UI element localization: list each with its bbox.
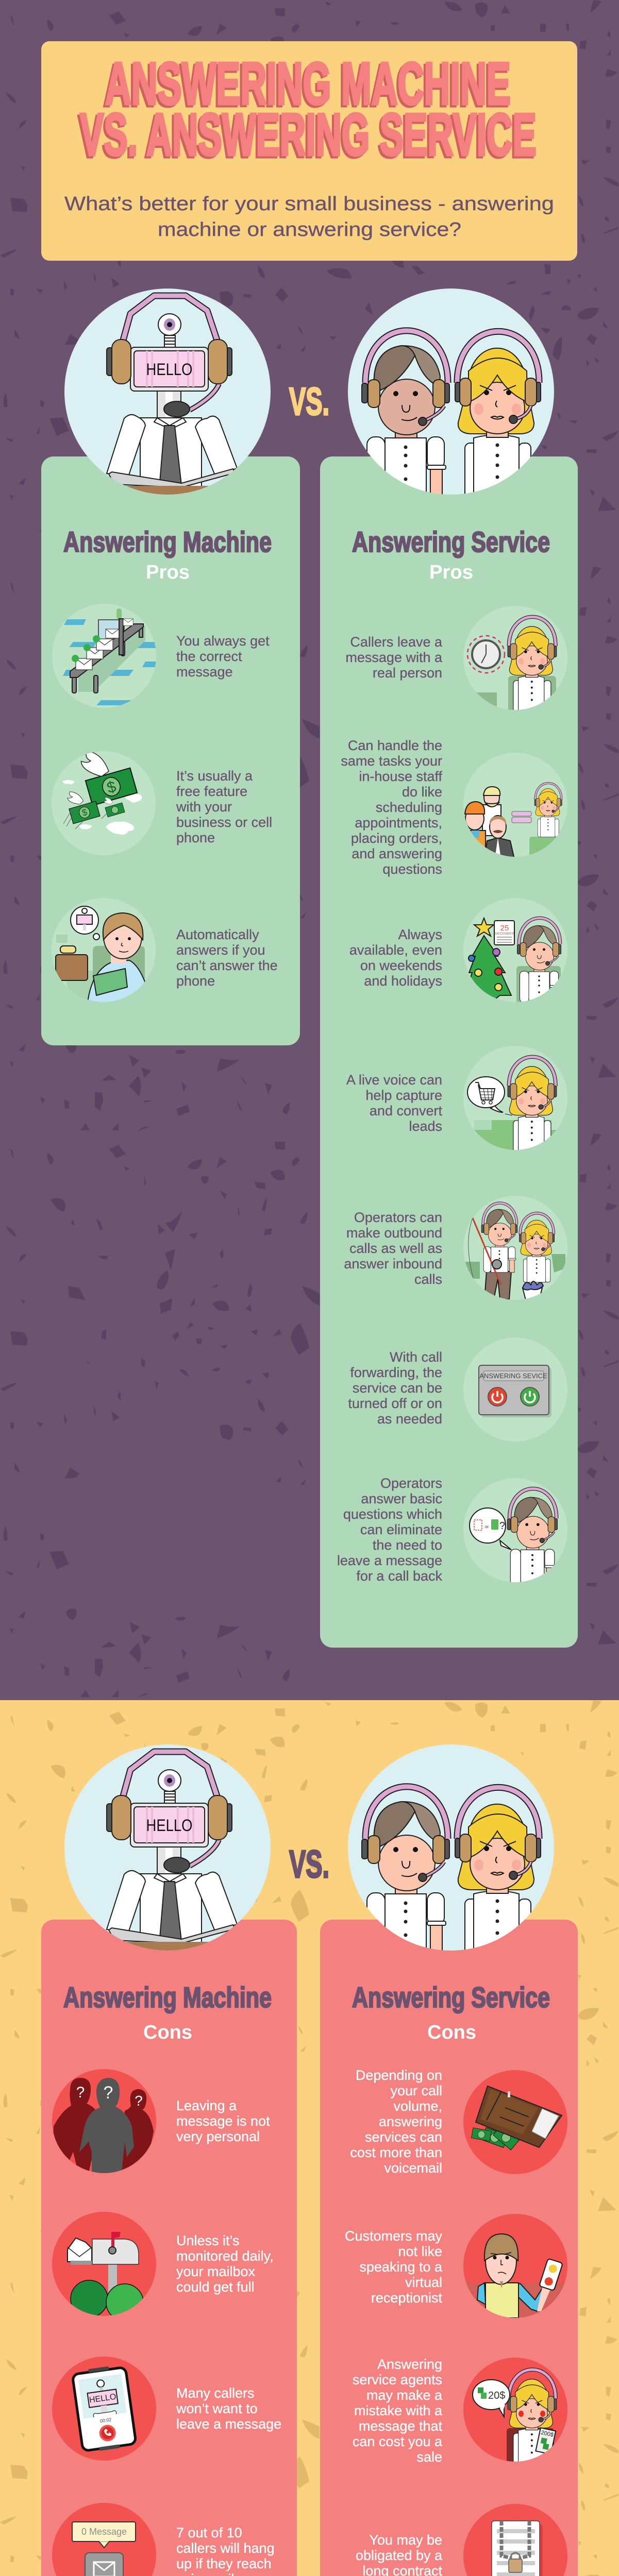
pro: capture leads: [346, 1046, 567, 1153]
icon: anonymous silhouettes: ?: [104, 2083, 113, 2103]
text: your mailbox: [176, 2264, 256, 2279]
heading: cons right: Cons: [427, 2022, 476, 2043]
text: and holidays: [364, 973, 442, 989]
text: could get full: [176, 2279, 255, 2295]
icon: empty message notification: 0 Message: [81, 2527, 127, 2537]
icon: christmas tree and calendar: DECEMBER: [495, 932, 514, 936]
text: and answering: [352, 846, 442, 861]
icon: flying money: $: [105, 778, 118, 797]
con: mistakes: [353, 2357, 567, 2466]
con: callers hang up: [52, 2503, 275, 2576]
panel: answering service pros: [320, 456, 578, 1648]
text: business or cell: [176, 815, 272, 830]
icon: fishing and flowers operators: [463, 1196, 567, 1300]
background: purple pros section: [0, 0, 619, 1700]
text: real person: [373, 665, 442, 681]
icon: clock and operator: [463, 606, 567, 713]
icon: anonymous silhouettes: [52, 2069, 156, 2173]
text: service agents: [353, 2372, 442, 2387]
text: virtual: [405, 2275, 442, 2290]
text: Depending on: [356, 2067, 442, 2083]
text: make outbound: [346, 1225, 442, 1241]
icon: on off switch panel: [463, 1337, 567, 1442]
pro: call forwarding: [348, 1337, 567, 1442]
text: help capture: [365, 1088, 442, 1103]
text: Operators can: [354, 1210, 442, 1225]
illustration: human operators: [348, 1744, 554, 1956]
icon: smartphone with robot: [52, 2357, 156, 2461]
heading: answering machine: Answering Machine: [63, 526, 272, 558]
text: speaking to a: [359, 2259, 443, 2275]
text: with your: [176, 799, 232, 815]
icon: anonymous silhouettes: ?: [76, 2084, 85, 2101]
text: scheduling: [376, 800, 442, 815]
panel: answering machine cons: [41, 1920, 297, 2576]
icon: smartphone with robot: 00:02: [99, 2417, 112, 2424]
vs label: VS.: [289, 380, 329, 423]
illustration: human operators: [348, 289, 554, 500]
text: sale: [416, 2449, 442, 2465]
text: for a call back: [356, 1568, 442, 1584]
text: It’s usually a: [176, 768, 253, 784]
text: Answering: [377, 2357, 442, 2372]
text: answer inbound: [344, 1256, 442, 1272]
text: forwarding, the: [350, 1365, 442, 1380]
text: your call: [390, 2083, 442, 2098]
icon: person with book: [52, 898, 156, 1004]
pro: free feature: [52, 750, 272, 855]
illustration: robot answering machine: [64, 1744, 271, 1952]
text: Unless it’s: [176, 2233, 240, 2248]
con: virtual receptionist: [345, 2214, 567, 2319]
text: turned off or on: [348, 1396, 442, 1411]
panel: answering machine pros: [41, 456, 300, 1045]
pro: outbound and inbound: [344, 1196, 567, 1300]
text: as needed: [377, 1411, 442, 1427]
icon: operator with wrong price: [463, 2358, 567, 2466]
text: questions which: [343, 1506, 442, 1522]
panel: answering service cons: [320, 1920, 578, 2576]
icon: shopping bubble and operator: [463, 1046, 567, 1153]
text: do like: [402, 784, 442, 800]
text: obligated by a: [356, 2548, 443, 2563]
pro: real person: [345, 606, 567, 713]
icon: conveyor of envelopes: [52, 604, 156, 708]
icon: staff equals operator: [463, 753, 567, 860]
background: yellow cons section: [0, 1700, 619, 2576]
text: leads: [409, 1118, 442, 1134]
text: message: [176, 664, 233, 680]
heading: answering service: Answering Service: [352, 1981, 550, 2013]
text: phone: [176, 830, 215, 845]
text: receptionist: [371, 2290, 442, 2306]
icon: on off switch panel: ANSWERING SEVICE: [479, 1372, 547, 1380]
icon: empty message notification: [52, 2503, 156, 2576]
icon: flying money: [52, 750, 156, 855]
text: You may be: [369, 2532, 442, 2548]
text: monitored daily,: [176, 2248, 274, 2264]
title: [80, 50, 537, 168]
text: Automatically: [176, 927, 259, 942]
icon: operator with wrong price: 200$: [540, 2430, 554, 2438]
icon: operator with wrong price: 20$: [488, 2390, 505, 2401]
pro: automatic answer: [52, 898, 278, 1004]
subtitle: What’s better for your small business - answering: [64, 193, 554, 215]
icon: anonymous silhouettes: ?: [135, 2093, 143, 2109]
text: leave a message: [176, 2416, 281, 2432]
pro: handles in-house tasks: [341, 738, 567, 877]
text: message that: [359, 2418, 442, 2434]
icon: open wallet: [463, 2070, 567, 2174]
text: in-house staff: [359, 769, 442, 784]
text: message with a: [345, 650, 443, 665]
text: message is not: [176, 2113, 270, 2129]
text: With call: [390, 1349, 442, 1365]
icon: contract with chains: [463, 2504, 567, 2576]
vs label: VS.: [289, 1842, 329, 1886]
icon: christmas tree and calendar: [463, 898, 567, 1003]
text: appointments,: [355, 815, 442, 831]
text: the correct: [176, 649, 242, 664]
text: service can be: [353, 1380, 442, 1396]
subtitle: [64, 193, 554, 241]
text: callers will hang: [176, 2540, 275, 2556]
text: calls: [414, 1272, 442, 1287]
heading: answering machine: Answering Machine: [63, 1981, 272, 2013]
text: Always: [398, 927, 442, 942]
icon: annoyed man with phone: [463, 2214, 567, 2319]
text: Can handle the: [348, 738, 442, 753]
text: answer basic: [361, 1491, 442, 1506]
text: not like: [398, 2244, 442, 2259]
text: very personal: [176, 2129, 260, 2144]
text: and convert: [370, 1103, 442, 1118]
subtitle: machine or answering service?: [158, 219, 461, 241]
text: answers if you: [176, 942, 265, 958]
heading: pros left: Pros: [146, 562, 190, 583]
icon: smartphone with robot: HELLO: [89, 2393, 116, 2405]
text: Operators: [380, 1476, 442, 1491]
text: placing orders,: [351, 831, 442, 846]
text: calls as well as: [349, 1241, 442, 1256]
con: long contract: [356, 2504, 567, 2576]
icon: question bubble and operator: ?: [499, 1520, 505, 1532]
text: Callers leave a: [350, 634, 443, 650]
pro: correct message: [52, 604, 270, 708]
text: A live voice can: [346, 1072, 442, 1088]
text: questions: [382, 861, 442, 877]
con: callers won't leave message: [52, 2357, 281, 2461]
text: Leaving a: [176, 2098, 237, 2113]
text: may make a: [366, 2387, 443, 2403]
text: You always get: [176, 633, 270, 649]
text: 7 out of 10: [176, 2525, 242, 2540]
heading: answering service: Answering Service: [352, 526, 550, 558]
con: mailbox full: [52, 2212, 274, 2321]
text: leave a message: [337, 1553, 442, 1568]
text: can’t answer the: [176, 958, 278, 973]
con: not personal: [52, 2069, 270, 2173]
illustration: robot answering machine: HELLO: [146, 1816, 193, 1835]
pro: basic questions: [337, 1476, 567, 1585]
text: voicemail: [384, 2160, 442, 2176]
text: volume,: [393, 2098, 442, 2114]
text: can eliminate: [360, 1522, 442, 1537]
title card: [41, 41, 577, 261]
text: answering: [379, 2114, 442, 2129]
heading: pros right: Pros: [429, 562, 473, 583]
text: cost more than: [350, 2145, 442, 2160]
text: can cost you a: [353, 2434, 443, 2449]
text: free feature: [176, 784, 247, 799]
text: Customers may: [345, 2228, 442, 2244]
pro: always available: [349, 898, 567, 1003]
text: the need to: [373, 1537, 442, 1553]
text: on weekends: [360, 958, 442, 973]
icon: question bubble and operator: [463, 1478, 567, 1585]
text: available, even: [349, 942, 442, 958]
con: can cost more: [350, 2067, 567, 2176]
icon: question bubble and operator: or: [485, 1524, 489, 1529]
text: services can: [365, 2129, 442, 2145]
illustration: robot answering machine: [64, 289, 271, 496]
illustration: robot answering machine: HELLO: [146, 360, 193, 379]
icon: christmas tree and calendar: 25: [500, 924, 509, 933]
text: won’t want to: [176, 2401, 258, 2416]
icon: flying money: $: [80, 807, 89, 818]
text: mistake with a: [354, 2403, 443, 2418]
heading: cons left: Cons: [143, 2022, 192, 2043]
text: up if they reach: [176, 2556, 272, 2571]
text: same tasks your: [341, 753, 442, 769]
text: Many callers: [176, 2385, 255, 2401]
text: phone: [176, 973, 215, 989]
icon: mailbox: [52, 2212, 156, 2321]
